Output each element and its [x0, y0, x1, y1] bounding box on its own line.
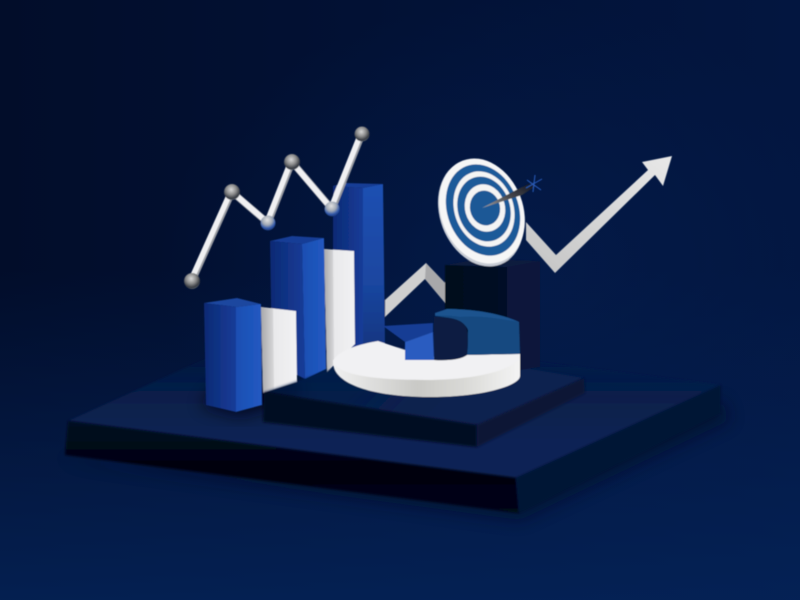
node 6 — [354, 126, 370, 142]
dart — [482, 175, 542, 208]
white base segment — [333, 341, 520, 397]
bar 2: blue — [270, 236, 326, 379]
target ring middle — [449, 170, 519, 248]
upper platform — [263, 347, 585, 447]
scene objects — [184, 126, 672, 447]
bar 2 white — [324, 249, 355, 372]
growth arrow: rear segment — [385, 263, 446, 317]
shadow under blue bars — [200, 380, 300, 416]
target bullseye — [467, 188, 503, 228]
dark pedestal box — [445, 259, 540, 372]
node 4 — [284, 154, 300, 170]
donut chart — [333, 309, 520, 397]
node 5 — [324, 202, 340, 216]
growth arrow: front segment with head — [526, 156, 672, 273]
bar 1: blue — [204, 298, 262, 412]
bar 1 white — [261, 307, 297, 393]
target ring outer — [433, 153, 533, 267]
node 1 — [184, 273, 200, 289]
teal segment — [434, 309, 520, 360]
node 3 — [260, 216, 276, 230]
target board — [423, 146, 540, 279]
bar 3: tall blue — [333, 183, 385, 350]
lower platform — [60, 328, 730, 520]
line chart with metal nodes — [184, 126, 370, 289]
node 2 — [224, 184, 240, 200]
blue segment — [383, 323, 434, 360]
